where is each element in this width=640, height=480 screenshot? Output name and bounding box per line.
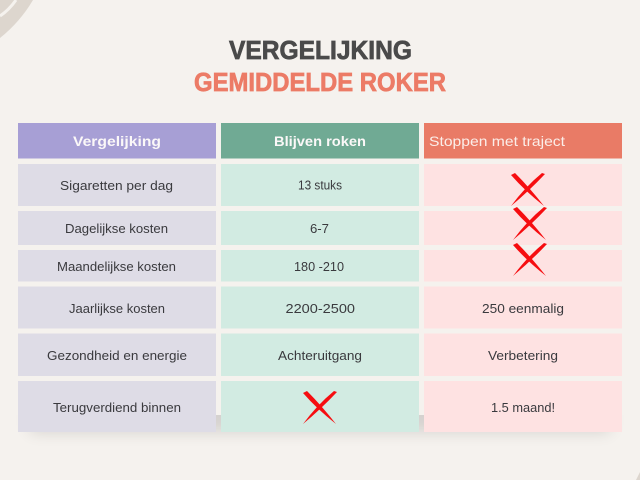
cell: 13 stuks: 13 stuks — [298, 178, 342, 192]
cell: 6-7 — [221, 211, 419, 245]
row label: Sigaretten per dag: Sigaretten per dag — [60, 179, 173, 193]
cell: 2200-2500: 2200-2500 — [286, 302, 355, 316]
table shadow — [31, 415, 609, 437]
cell: 180 -210: 180 -210 — [294, 260, 344, 274]
column: Blijven roken — [221, 123, 419, 432]
cell: dagelijks, empty — [424, 211, 622, 245]
row label: Dagelijkse kosten: Dagelijkse kosten — [65, 222, 168, 236]
header: Stoppen met traject: Stoppen met traject — [429, 133, 565, 149]
row label: Dagelijkse kosten — [18, 211, 216, 245]
cell: Achteruitgang — [221, 334, 419, 376]
row label: Sigaretten per dag — [18, 164, 216, 206]
row label: Maandelijkse kosten: Maandelijkse kosten — [57, 260, 176, 274]
cell: 13 stuks — [221, 164, 419, 206]
icon: red cross, terugverdiend — [303, 391, 337, 424]
title line 2: GEMIDDELDE ROKER — [194, 69, 446, 97]
column: Vergelijking — [18, 123, 216, 432]
cell: maandelijks, empty — [424, 250, 622, 282]
row label: Jaarlijkse kosten — [18, 286, 216, 328]
header: Vergelijking — [18, 123, 216, 158]
row label: Terugverdiend binnen: Terugverdiend binnen — [53, 401, 181, 415]
cell: Verbetering — [424, 334, 622, 376]
cell: Verbetering: Verbetering — [488, 349, 558, 363]
icon: red cross, sigaretten — [511, 173, 545, 206]
row label: Terugverdiend binnen — [18, 381, 216, 432]
title — [194, 37, 446, 97]
title line 1: VERGELIJKING — [229, 37, 412, 65]
header: Blijven roken: Blijven roken — [274, 133, 366, 149]
cell: 6-7: 6-7 — [310, 222, 329, 236]
header: Vergelijking: Vergelijking — [73, 133, 161, 149]
cell: terugverdiend, empty — [221, 381, 419, 432]
row label: Gezondheid en energie — [18, 334, 216, 376]
decoration: top-left corner arc — [0, 0, 33, 38]
row label: Gezondheid en energie: Gezondheid en energie — [47, 349, 187, 363]
cell: 180 -210 — [221, 250, 419, 282]
cell: Achteruitgang: Achteruitgang — [278, 349, 362, 363]
icon: red cross, maandelijks — [513, 243, 547, 276]
cell: 1.5 maand!: 1.5 maand! — [491, 401, 555, 415]
icon: red cross, dagelijks — [513, 207, 547, 240]
cell: 1.5 maand! — [424, 381, 622, 432]
header: Stoppen met traject — [424, 123, 622, 158]
row label: Maandelijkse kosten — [18, 250, 216, 282]
cell: 250 eenmalig: 250 eenmalig — [482, 302, 564, 316]
header: Blijven roken — [221, 123, 419, 158]
decoration: bottom-right corner arc — [636, 472, 640, 480]
column: Stoppen met traject — [424, 123, 622, 432]
cell: sigaretten, empty — [424, 164, 622, 206]
cell: 2200-2500 — [221, 286, 419, 328]
cell: 250 eenmalig — [424, 286, 622, 328]
row label: Jaarlijkse kosten: Jaarlijkse kosten — [69, 302, 165, 316]
